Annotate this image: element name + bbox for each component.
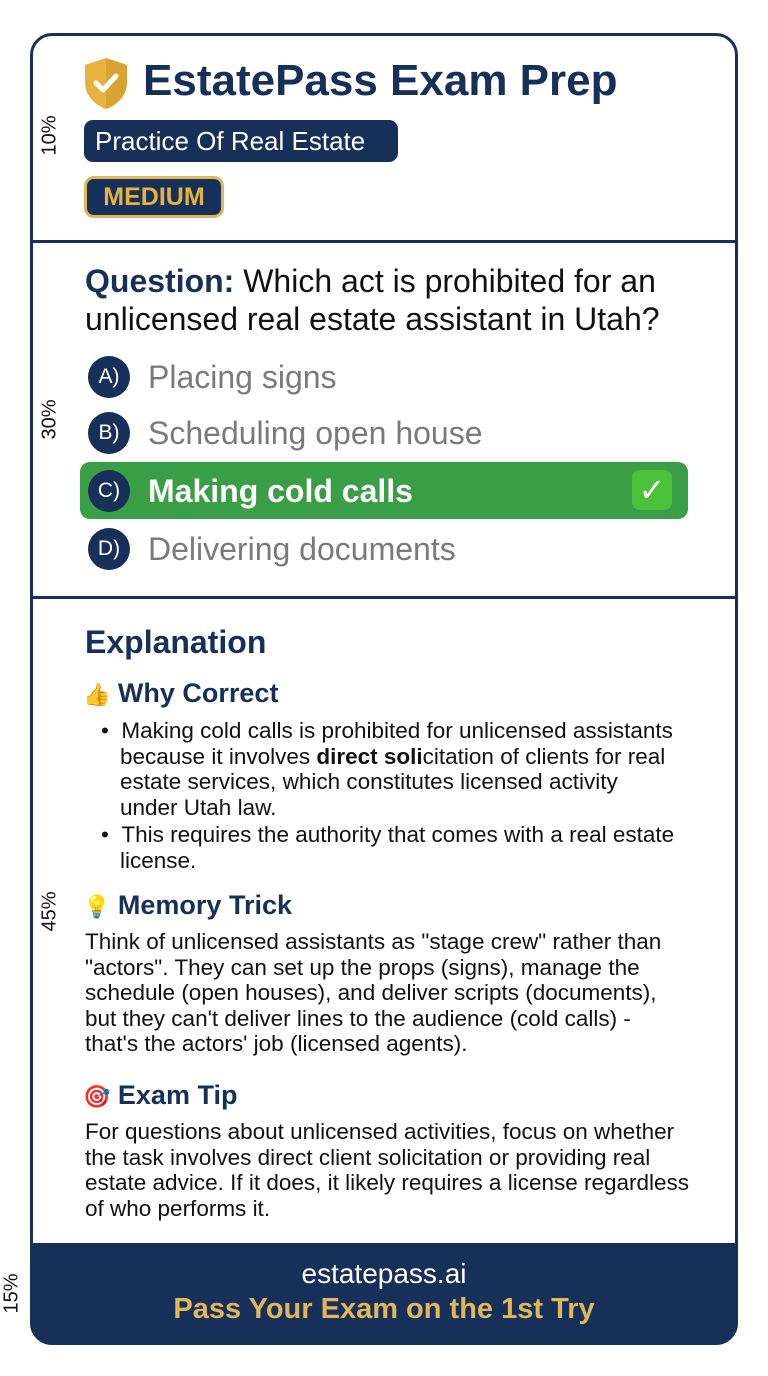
divider lines xyxy=(30,240,738,243)
exam tip heading: 🎯 Exam Tip xyxy=(83,1080,237,1110)
memory trick heading: 💡 Memory Trick xyxy=(83,890,292,920)
option D: Delivering documents xyxy=(148,530,456,566)
header panel xyxy=(84,56,618,218)
option A: Placing signs xyxy=(148,358,337,394)
option D: D) xyxy=(98,537,120,560)
option A: A) xyxy=(98,365,120,388)
why correct bullets xyxy=(101,718,674,872)
exam tip text: the task involves direct client solicitation or providing real xyxy=(85,1144,650,1170)
option C correct xyxy=(80,462,688,519)
question text xyxy=(85,263,660,337)
why correct bullets: estate services, which constitutes licensed activity xyxy=(120,769,618,794)
why correct bullets: because it involves direct solicitation of clients for real xyxy=(120,744,665,768)
topic pill: Practice Of Real Estate xyxy=(95,126,365,156)
side label: 10%: 10% xyxy=(38,115,60,156)
side label: 30%: 30% xyxy=(38,399,60,440)
memory trick text: that's the actors' job (licensed agents). xyxy=(85,1031,468,1056)
memory trick text: "actors". They can set up the props (signs), manage the xyxy=(85,954,640,980)
side label: 45%: 45% xyxy=(38,891,60,932)
question panel xyxy=(80,263,688,570)
why correct bullets: • Making cold calls is prohibited for unlicensed assistants xyxy=(101,718,673,743)
difficulty pill: MEDIUM xyxy=(103,183,205,211)
explanation heading: Explanation xyxy=(85,624,266,660)
icon: check mark: ✓ xyxy=(639,472,665,508)
question text: Question: Which act is prohibited for an xyxy=(85,263,656,299)
option B: B) xyxy=(98,421,120,444)
icon: shield xyxy=(85,58,127,109)
title: EstatePass Exam Prep xyxy=(143,56,618,105)
why correct bullets: license. xyxy=(120,848,196,872)
exam tip text: estate advice. If it does, it likely requires a license regardless xyxy=(85,1170,689,1195)
footer tagline: Pass Your Exam on the 1st Try xyxy=(173,1293,595,1325)
exam tip text: For questions about unlicensed activities, focus on whether xyxy=(85,1119,674,1144)
topic pill xyxy=(84,120,398,162)
exam tip text: of who performs it. xyxy=(85,1196,270,1220)
why correct bullets: under Utah law. xyxy=(120,794,276,820)
memory trick text: schedule (open houses), and deliver scripts (documents), xyxy=(85,980,657,1005)
side label: 15%: 15% xyxy=(0,1273,22,1314)
question text: unlicensed real estate assistant in Utah? xyxy=(85,301,660,337)
explanation panel xyxy=(83,624,689,1220)
option A xyxy=(88,356,337,398)
difficulty pill xyxy=(84,176,224,218)
memory trick text: but they can't deliver lines to the audience (cold calls) - xyxy=(85,1006,631,1030)
option B: Scheduling open house xyxy=(148,414,482,450)
why correct bullets: • This requires the authority that comes with a real estate xyxy=(101,822,674,847)
why correct heading: 👍 Why Correct xyxy=(83,678,278,708)
icon: check mark xyxy=(632,470,672,510)
exam tip text xyxy=(85,1119,689,1220)
memory trick text: Think of unlicensed assistants as "stage crew" rather than xyxy=(85,929,661,954)
memory trick text xyxy=(85,929,661,1056)
option C correct: C) xyxy=(98,479,120,502)
footer xyxy=(30,1243,738,1345)
option C correct: Making cold calls xyxy=(148,472,413,508)
footer url: estatepass.ai xyxy=(302,1258,466,1289)
